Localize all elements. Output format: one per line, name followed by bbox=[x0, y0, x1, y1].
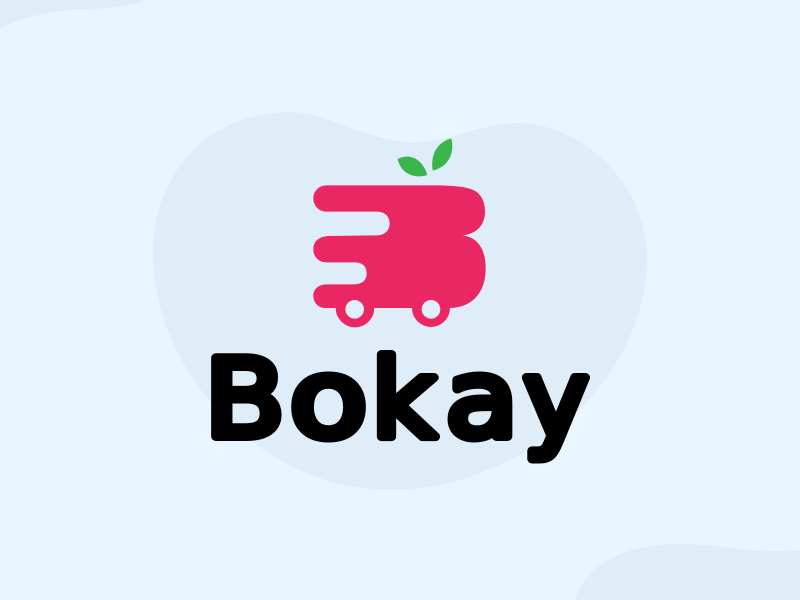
brand name: a bbox=[445, 338, 518, 462]
icon: truck body and wheels bbox=[313, 185, 486, 327]
brand name: k bbox=[371, 338, 436, 462]
icon: left wheel hole bbox=[345, 300, 364, 319]
background blob: bottom-right corner bbox=[575, 544, 800, 600]
icon: right wheel hole bbox=[422, 300, 440, 319]
brand name: B bbox=[204, 338, 285, 462]
logo mark: delivery truck B with leaves bbox=[313, 138, 486, 327]
background blob: top-left corner bbox=[0, 0, 146, 29]
icon: right leaf bbox=[432, 138, 452, 171]
brand name: o bbox=[290, 338, 368, 462]
icon: left leaf bbox=[398, 157, 427, 176]
background blob: central heart shape bbox=[153, 112, 647, 490]
brand name: y bbox=[523, 338, 589, 462]
